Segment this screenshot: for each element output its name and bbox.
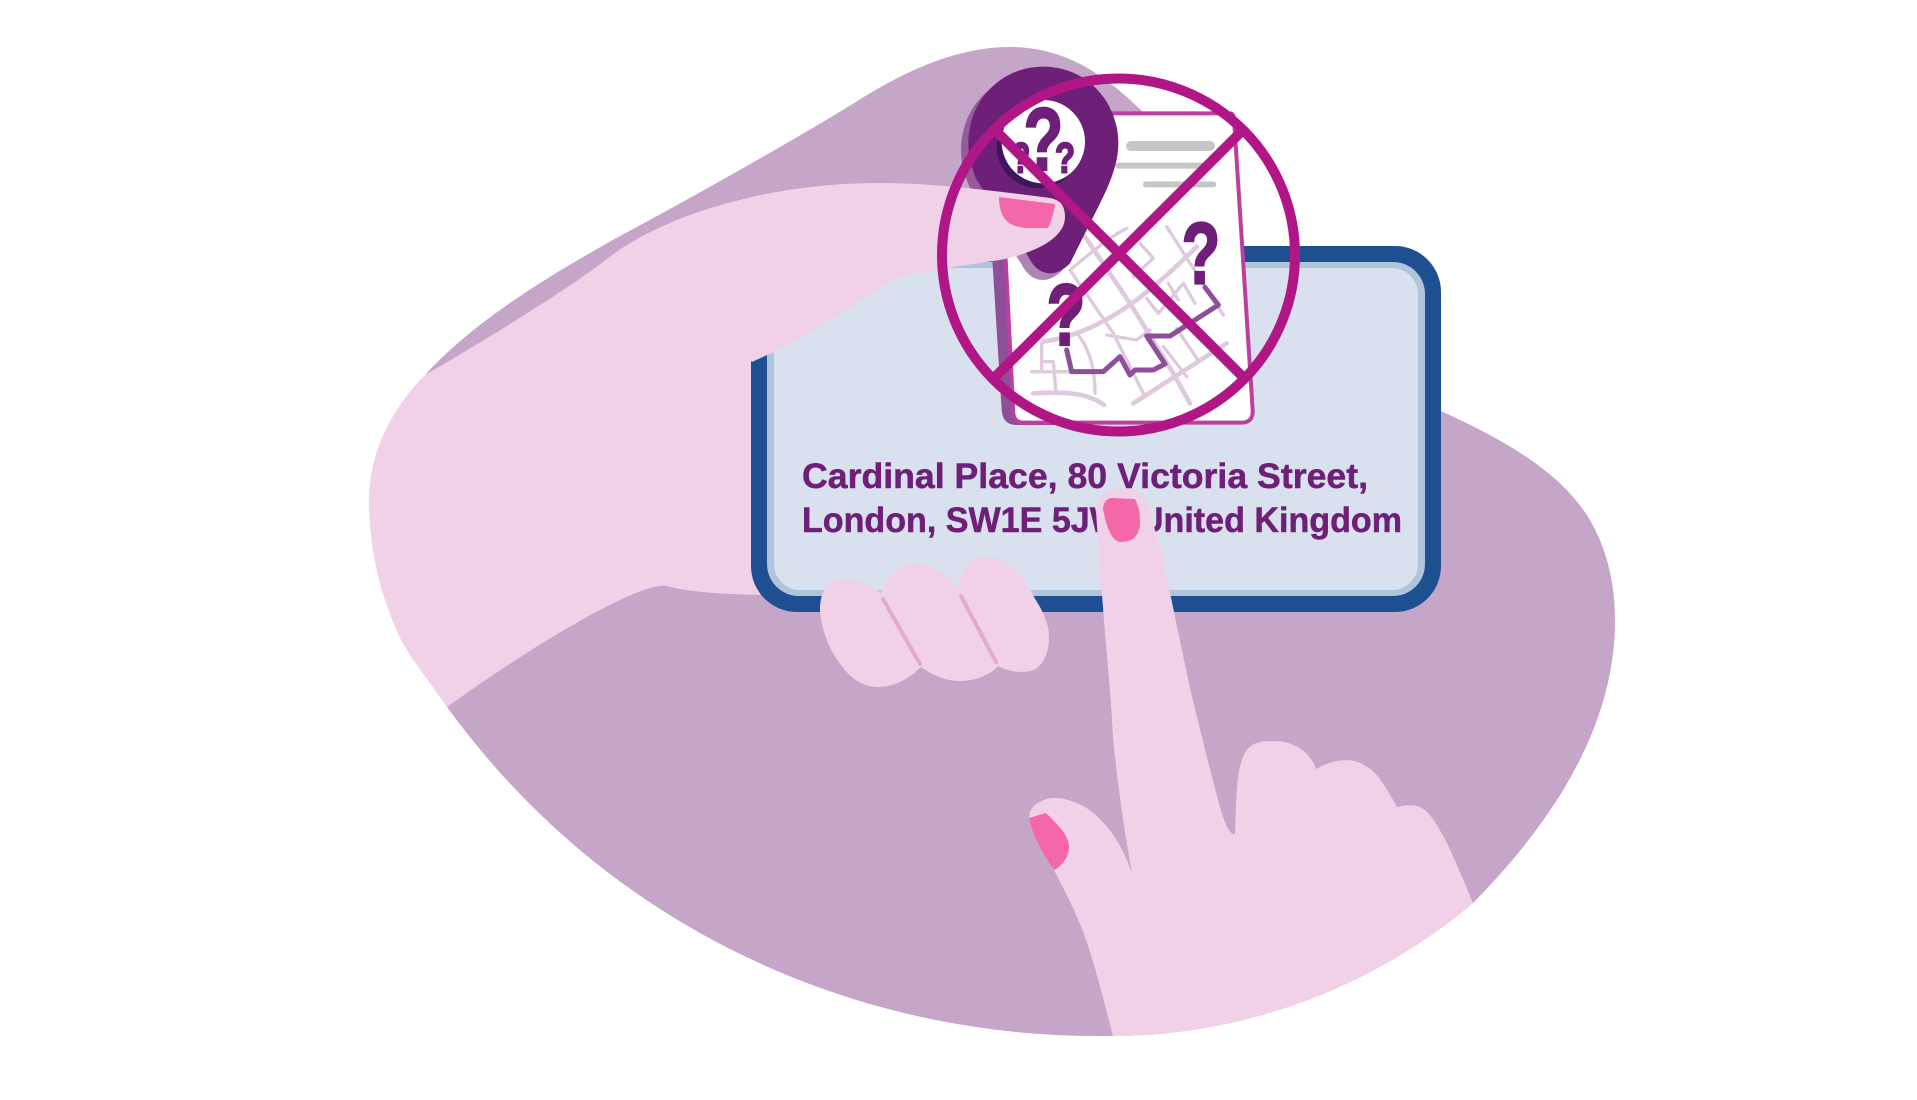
card inner edge <box>767 262 1425 596</box>
finger shapes <box>820 557 1049 687</box>
thumb <box>700 183 1065 362</box>
address card <box>751 246 1441 612</box>
fingers behind the card <box>820 557 1049 687</box>
address text: Cardinal Place, 80 Victoria Street, <box>802 457 1368 496</box>
cross <box>995 130 1243 377</box>
pin hole shadow <box>997 105 1080 188</box>
address text <box>802 457 1402 540</box>
thumb over the pin <box>700 183 1065 362</box>
walking route <box>1067 287 1218 375</box>
text lines <box>1118 146 1213 184</box>
pin shadow <box>961 73 1111 280</box>
thumb nail <box>1029 813 1069 870</box>
question marks on map: ? <box>1047 266 1085 364</box>
pointing hand <box>1029 488 1473 1036</box>
pin hole <box>1002 100 1085 183</box>
pin body <box>968 67 1118 273</box>
map roads <box>1032 227 1227 405</box>
card face <box>774 268 1418 590</box>
circle <box>942 78 1295 432</box>
address text: London, SW1E 5JW, United Kingdom <box>802 501 1402 540</box>
background blob <box>425 47 1615 1036</box>
index finger nail <box>1103 498 1140 542</box>
hand <box>1029 488 1473 1036</box>
prohibition sign <box>942 78 1295 432</box>
card frame <box>751 246 1441 612</box>
document sheet <box>998 113 1253 423</box>
arm holding the card <box>369 183 1050 707</box>
question marks in pin: ? <box>1055 134 1075 182</box>
question marks on map: ? <box>1182 204 1220 302</box>
location pin <box>961 67 1118 280</box>
knuckle lines <box>883 596 996 664</box>
question marks on map <box>1047 204 1220 364</box>
question marks in pin: ? <box>1012 134 1030 182</box>
map document with pin <box>961 67 1253 425</box>
question marks in pin: ? <box>1023 89 1063 189</box>
thumb nail <box>999 197 1055 228</box>
document shadow <box>983 115 1067 425</box>
